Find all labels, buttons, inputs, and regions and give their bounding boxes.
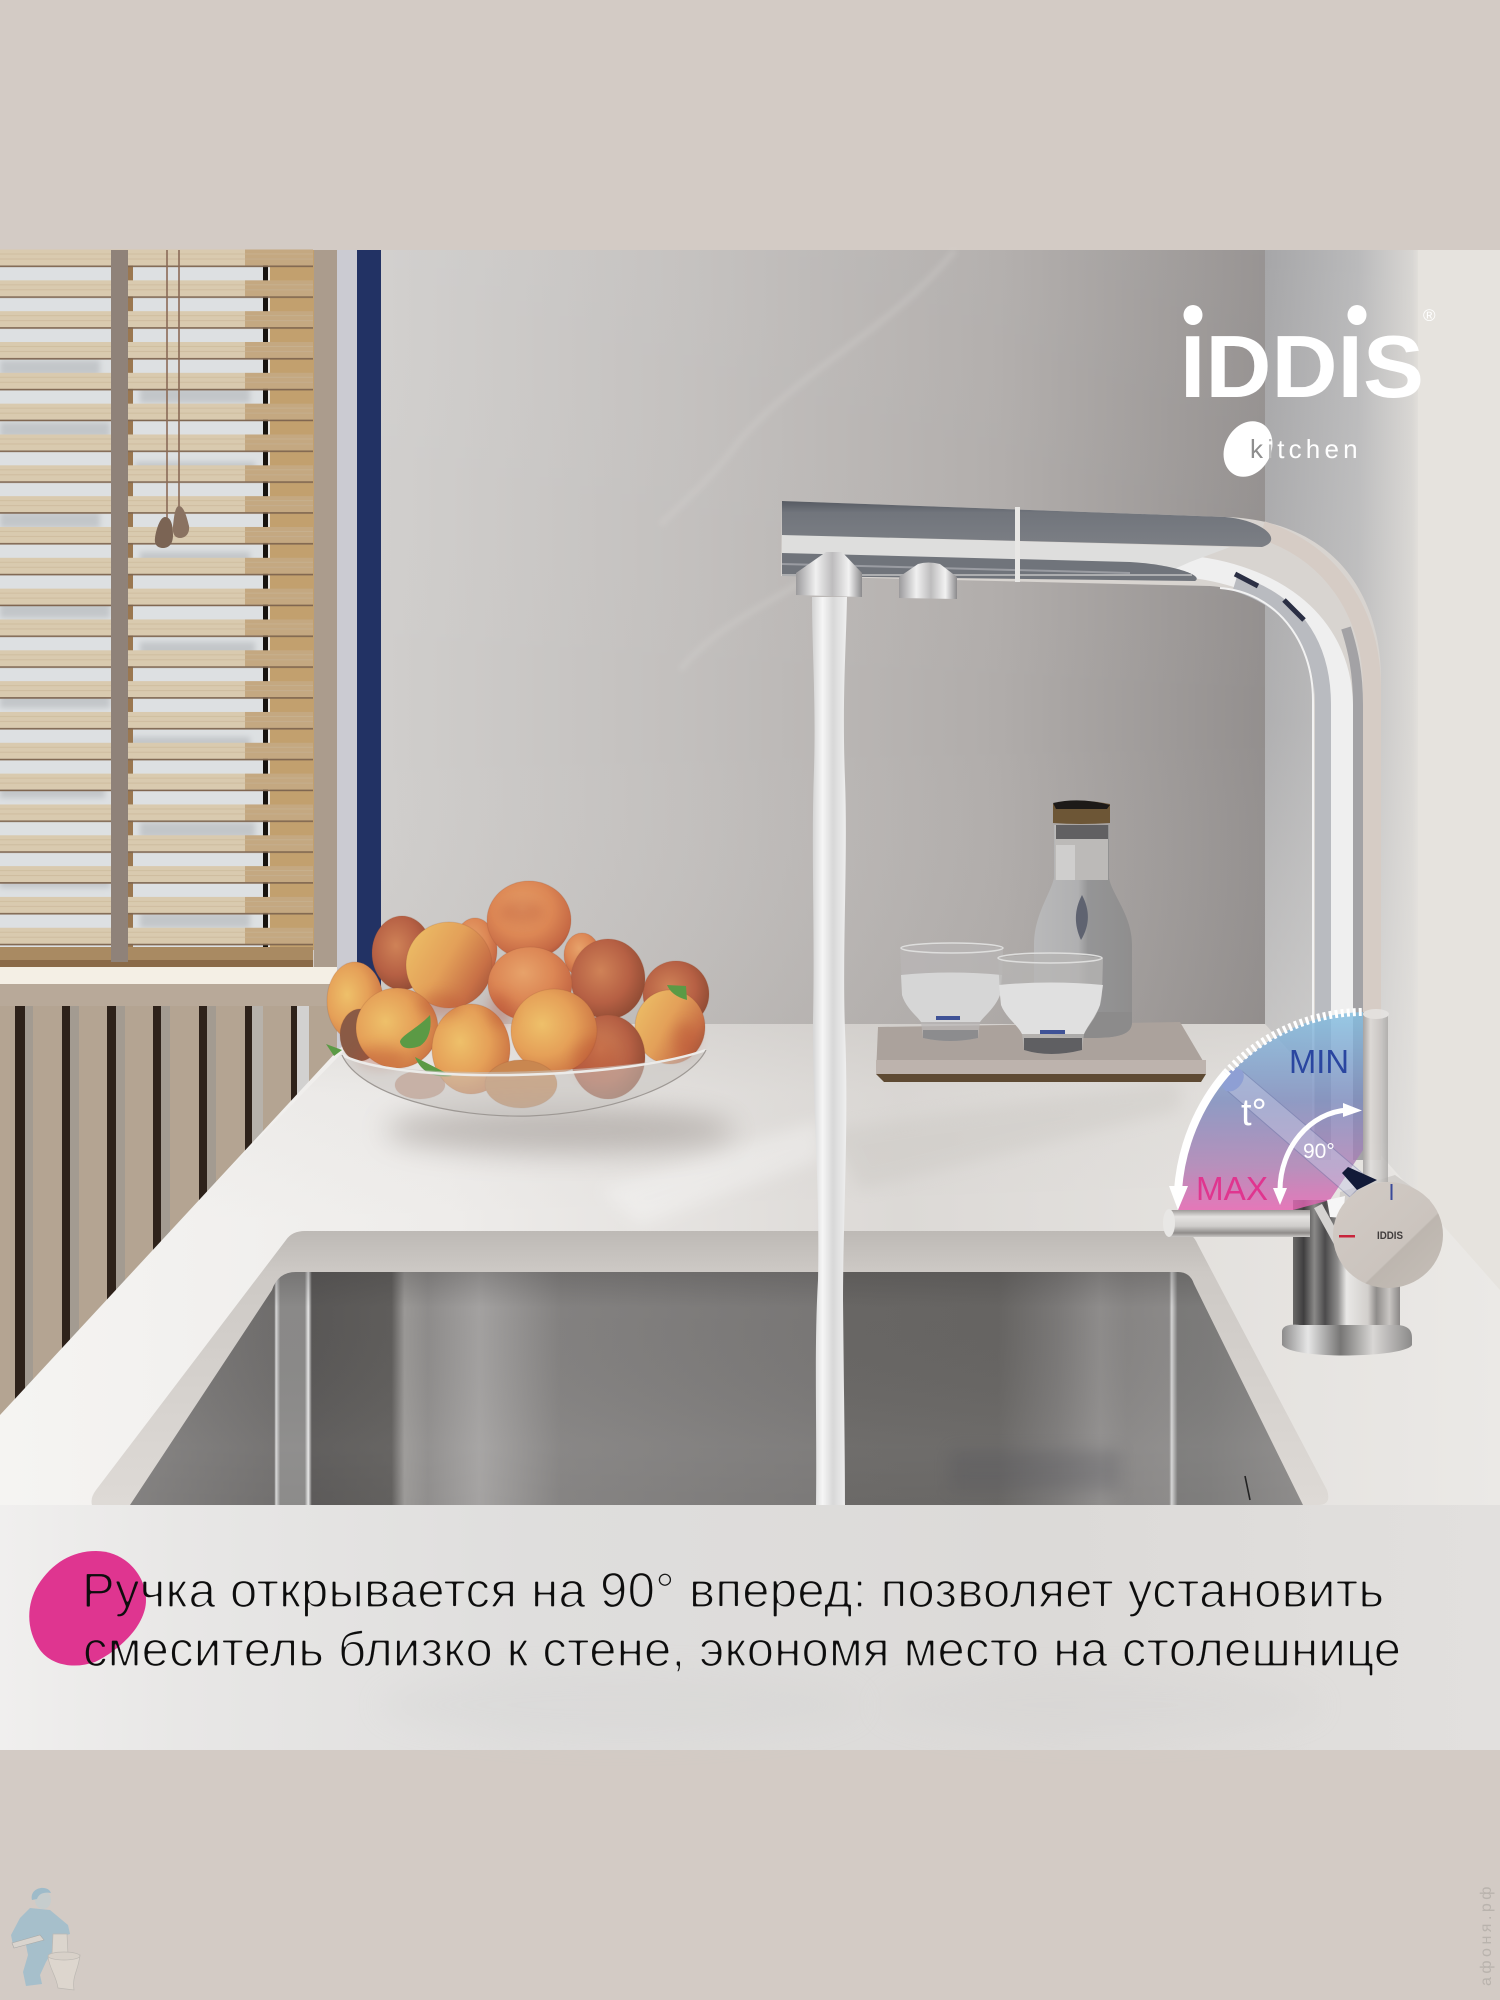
- mixer foot: [1282, 1325, 1412, 1356]
- blind cords: [155, 250, 189, 548]
- peach blush: [356, 900, 697, 1082]
- toilet: [48, 1934, 80, 1990]
- caption line 1: Ручка открывается на 90° вперед: позволяет установить: [82, 1564, 1384, 1618]
- glass left: [900, 943, 1003, 1041]
- window frame: [314, 250, 337, 984]
- window sill: [0, 967, 337, 1006]
- sink: [92, 1231, 1328, 1505]
- label MAX: MAX: [1196, 1170, 1268, 1207]
- light wall strip: [337, 250, 357, 1050]
- spout top grey band: [782, 501, 1271, 547]
- spout slit: [1015, 507, 1020, 582]
- carafe: [1034, 800, 1132, 1038]
- wood slat panel: [0, 1006, 337, 1426]
- watermark: plumber: [11, 1888, 80, 1990]
- window blinds: [0, 250, 314, 967]
- sink rim: [92, 1231, 1328, 1505]
- water stream: [812, 597, 847, 1505]
- caption text: [82, 1564, 1401, 1677]
- kitchen blob: [1214, 413, 1282, 485]
- plumber wrench: [12, 1935, 44, 1948]
- plumber head: [32, 1888, 51, 1909]
- caption line 2: смеситель близко к стене, экономя место на столешнице: [83, 1623, 1401, 1677]
- aerator left: [796, 552, 862, 597]
- mixer neck highlight: [1318, 1206, 1350, 1264]
- blind tape: [111, 250, 128, 962]
- mixer neck: [1336, 1175, 1430, 1285]
- horizontal handle: [1163, 1209, 1310, 1237]
- label MIN: MIN: [1289, 1043, 1349, 1080]
- faucet spout: [781, 501, 1381, 1160]
- logo wordmark: IDDIS: [1180, 317, 1424, 416]
- countertop: [0, 1024, 1500, 1750]
- spout horizontal section: [782, 535, 1230, 580]
- back wall: [381, 250, 1265, 1050]
- mixer disc: [1327, 1182, 1443, 1288]
- logo: iddis kitchen: [1180, 305, 1436, 485]
- label 90°: 90°: [1303, 1140, 1335, 1163]
- pink accent blob: [29, 1551, 146, 1666]
- mixer stem: [1293, 1200, 1400, 1340]
- bowl shadow: [385, 1106, 735, 1154]
- right wall: [1265, 250, 1500, 1300]
- label t°: t°: [1241, 1092, 1267, 1134]
- watermark: site name: афоня.рф: [1478, 1883, 1495, 1986]
- peaches behind bowl: [327, 881, 709, 1108]
- vertical handle ghost: [1363, 1009, 1389, 1182]
- registered mark: ®: [1423, 306, 1436, 325]
- aerator right: [899, 562, 957, 599]
- mixer disc: IDDIS: [1377, 1230, 1403, 1242]
- diagonal handle ghost: [1218, 1064, 1377, 1197]
- faucet mixer: [1163, 1009, 1443, 1356]
- panel: kitchen photo: [0, 250, 1500, 1750]
- bottom translucent band: [0, 1505, 1500, 1750]
- spout bend and riser highlights: [1170, 530, 1372, 1160]
- navy wall stripe: [357, 250, 381, 1050]
- plumber suit: [11, 1908, 70, 1986]
- fruit bowl: [342, 1050, 706, 1116]
- sink basin: [130, 1272, 1303, 1505]
- arrow: temperature: [1169, 1073, 1226, 1210]
- arrow: 90 degree rotation: [1273, 1103, 1362, 1205]
- tray: [876, 1022, 1206, 1082]
- kitchen label: kitchen: [1250, 434, 1362, 464]
- gauge sector: [1178, 1012, 1363, 1210]
- glass right: [998, 953, 1103, 1054]
- leaves: [326, 985, 687, 1076]
- temperature ticks arc: [1226, 1012, 1363, 1073]
- spout lower grey strip: [782, 553, 1197, 581]
